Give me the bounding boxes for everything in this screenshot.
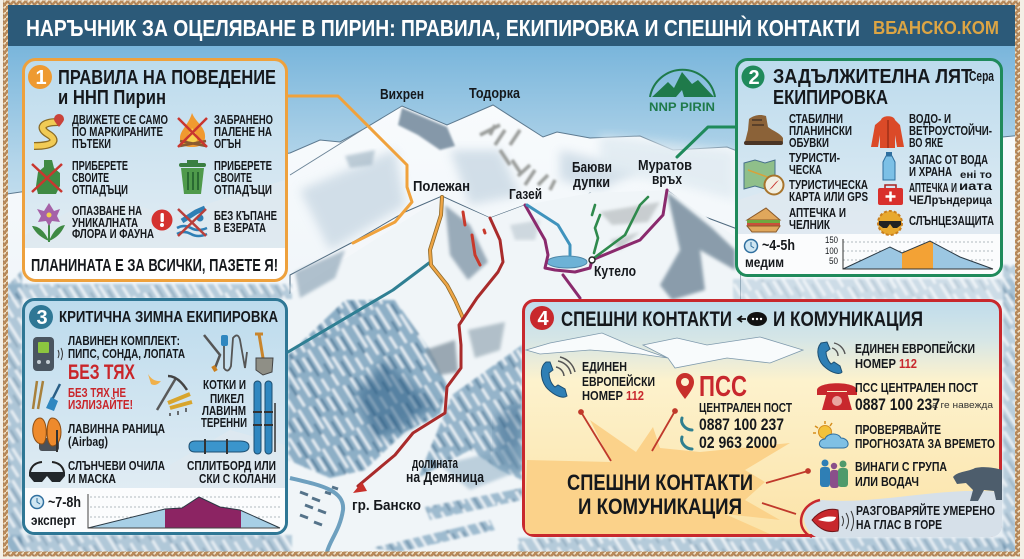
lake [547, 256, 587, 268]
PSS contact right [855, 381, 993, 414]
forecast text [855, 422, 995, 451]
rule text: no fire: ПАЛЕНЕ НА [214, 125, 272, 139]
icon: mouth [812, 509, 854, 532]
slogan: ПЛАНИНАТА Е ЗА ВСИЧКИ, ПАЗЕТЕ Я! [31, 255, 278, 275]
icon: warning [152, 210, 172, 230]
gear text: jacket: ВЕТРОУСТОЙЧИ- [909, 123, 992, 138]
rule text: no swimming: В ЕЗЕРАТА [214, 221, 266, 235]
group text: ВИНАГИ С ГРУПА [855, 460, 947, 474]
crampons and axe text: ТЕРЕННИ [201, 416, 247, 430]
rule text: waste right: ОТПАДЪЦИ [214, 183, 272, 197]
rule text: flora: ФЛОРА И ФАУНА [72, 227, 154, 241]
gear text: jacket: ВОДО- И [909, 112, 951, 126]
peak labels: Тодорка [469, 85, 521, 102]
title: НАРЪЧНИК ЗА ОЦЕЛЯВАНЕ В ПИРИН: ПРАВИЛА, ЕКИПИРОВКА И СПЕШНЍ КОНТАКТИ [26, 14, 860, 41]
rule text: marked trails: ПО МАРКИРАНИТЕ [72, 125, 163, 139]
panel 1: rules [24, 60, 286, 280]
routes [288, 96, 735, 486]
icon: no swimming [177, 208, 207, 236]
badge 2 [742, 66, 764, 88]
icon: airbag pack [33, 418, 61, 452]
panel 2: summer gear: 2 [748, 67, 760, 89]
icon: water bottle [883, 152, 895, 180]
icon: bear [953, 467, 1002, 501]
chart strip [738, 234, 1000, 274]
peak labels: Газей [509, 186, 542, 203]
warning text [68, 361, 135, 412]
orange trail from Polezhan [430, 197, 463, 318]
heading: КРИТИЧНА ЗИМНА ЕКИПИРОВКА [59, 309, 278, 326]
gear text: map: ТУРИСТИЧЕСКА [789, 178, 868, 192]
peak labels [352, 85, 692, 514]
rule text: no swimming: БЕЗ КЪПАНЕ [214, 209, 277, 223]
duration and difficulty: ~4-5h [762, 237, 795, 254]
panel 4: emergency contacts [524, 300, 1002, 537]
sky background [0, 0, 1024, 300]
lower valley forest mass left [288, 300, 447, 478]
heading: ПРАВИЛА НА ПОВЕДЕНИЕ [58, 67, 276, 89]
rule text: no fire [214, 113, 273, 151]
icon: flower [32, 203, 65, 242]
rule text: marked trails [72, 113, 168, 151]
quiet voice text [856, 503, 995, 532]
Bansko town [290, 478, 343, 552]
bottom strip [25, 248, 285, 279]
burst text [567, 470, 753, 519]
airbag text [68, 422, 165, 449]
peak labels: Муратов [638, 157, 692, 174]
splitboard text: СПЛИТБОРД ИЛИ [187, 459, 276, 473]
peak labels: Полежан [413, 178, 470, 195]
peak labels: гр. Банско [352, 497, 421, 514]
gear text: map: ЧЕСКА [789, 163, 822, 177]
gear text: first aid: АПТЕЧКА И [909, 181, 957, 195]
gear text: map: ТУРИСТИ- [789, 151, 840, 165]
icon: map and compass [744, 160, 784, 194]
icon: location pin [676, 373, 694, 399]
rule text: flora: ОПАЗВАНЕ НА [72, 204, 142, 218]
badge 4 [530, 306, 554, 330]
rule text: waste left: ПРИБЕРЕТЕ [72, 159, 128, 173]
EU number left: ЕДИНЕН [582, 360, 627, 374]
rule text: no fire: ОГЪН [214, 137, 241, 151]
rule text: waste right [214, 159, 272, 197]
icon: group [820, 460, 848, 488]
icon: no fire [178, 113, 207, 147]
gear text: first aid: ЧЕЛръндерица [909, 193, 992, 207]
gear text: sandwich [789, 206, 846, 232]
purple route [525, 190, 667, 298]
heading [561, 308, 923, 331]
blue route [527, 205, 570, 255]
PSS contact right: а ге навежда [932, 400, 993, 410]
peak labels: на Демяница [406, 469, 485, 486]
soft slope shadows [300, 150, 640, 250]
clock icon [744, 240, 758, 252]
group text [855, 460, 947, 489]
heading: И КОМУНИКАЦИЯ [773, 308, 923, 331]
gear text: boots: СТАБИЛНИ [789, 112, 843, 126]
warning text: БЕЗ ТЯХ [68, 361, 135, 384]
avalanche kit text: ПИПС, СОНДА, ЛОПАТА [68, 347, 185, 361]
badge 1 [28, 65, 52, 89]
icon: red telephone [817, 383, 857, 410]
rock shadow on Muratov side [660, 192, 735, 300]
rule text: waste right: ПРИБЕРЕТЕ [214, 159, 272, 173]
avalanche kit text: ЛАВИНЕН КОМПЛЕКТ: [68, 334, 180, 348]
icon: boot [744, 115, 783, 145]
group text: ИЛИ ВОДАЧ [855, 475, 919, 489]
crampons and axe text [201, 378, 247, 430]
crampons and axe text: ЛАВИНМ [202, 404, 246, 418]
icon: sun with glasses [878, 211, 902, 235]
peak labels: връх [652, 171, 683, 188]
peak labels: долината [412, 455, 458, 472]
icon: weather [813, 421, 848, 448]
icon: probe and shovel [33, 381, 60, 411]
green leader line to panel 2 [677, 127, 735, 157]
rule text: waste left: СВОИТЕ [72, 171, 109, 185]
NNP Pirin logo [649, 70, 715, 114]
PSS contact: ЦЕНТРАЛЕН ПОСТ [699, 401, 792, 415]
rule text: waste left [72, 159, 128, 197]
heading: ЗАДЪЛЖИТЕЛНА ЛЯТ [773, 66, 972, 88]
gear text: jacket: ВО ЯКЕ [909, 136, 943, 150]
mini mountains [526, 333, 803, 368]
quiet voice text: НА ГЛАС В ГОРЕ [856, 518, 942, 532]
green routes [592, 197, 648, 258]
gear text: boots: ОБУВКИ [789, 136, 829, 150]
panel 1: rules: и ННП Пирин [58, 87, 166, 109]
quiet voice text: РАЗГОВАРЯЙТЕ УМЕРЕНО [856, 503, 995, 518]
icon: sandwich [747, 208, 780, 232]
rule text: no swimming [214, 209, 277, 235]
site name: ВБАНСКО.КОМ [873, 18, 999, 38]
rule text: no fire: ЗАБРАНЕНО [214, 113, 273, 127]
EU number right [855, 341, 975, 371]
icon: jacket [871, 116, 904, 148]
Kutelo marker [589, 257, 595, 263]
gear text: jacket [909, 112, 992, 150]
NNP Pirin logo: NNP PIRIN [649, 100, 715, 114]
front slope body [280, 190, 740, 559]
clock icon [30, 496, 44, 508]
icon: ice axe and crampons [157, 376, 192, 416]
icon: avalanche beacon [33, 337, 62, 371]
crampons and axe text: КОТКИ И [203, 378, 246, 392]
peak labels: Кутело [594, 263, 636, 280]
panel 1: rules: 1 [36, 67, 47, 89]
sunglasses text: СЛЪНЧЕВИ ОЧИЛА [68, 459, 165, 473]
icon: phone left [541, 357, 575, 397]
duration and difficulty [31, 494, 81, 528]
forecast text: ПРОВЕРЯВАЙТЕ [855, 422, 941, 437]
icon: crossed plant [32, 160, 62, 194]
orange tick mark [148, 374, 161, 385]
icon: top right gear [204, 334, 273, 375]
icon: trail [34, 114, 64, 146]
gear text: first aid: иата [959, 179, 992, 193]
PSS contact: 0887 100 237 [699, 415, 784, 434]
Vihren ridge line [290, 130, 362, 175]
panel 3: winter gear [24, 300, 286, 534]
warning text: БЕЗ ТЯХ НЕ [68, 385, 126, 400]
panel 2: summer gear: Сера [969, 68, 994, 85]
gear text: sandwich: ЧЕЛНИК [789, 218, 830, 232]
duration and difficulty: эксперт [31, 512, 76, 528]
gear text: first aid [909, 179, 992, 207]
crampons and axe text: ПИКЕЛ [210, 392, 244, 406]
rule text: marked trails: ДВИЖЕТЕ СЕ САМО [72, 113, 168, 127]
gear text: water: И ХРАНА [909, 165, 952, 179]
burst text: СПЕШНИ КОНТАКТИ [567, 470, 753, 495]
gear text: water: ені то [960, 170, 992, 181]
rocks near route [425, 340, 458, 375]
chart strip [25, 488, 285, 532]
icon: sunglasses [29, 462, 65, 482]
duration and difficulty: ~7-8h [48, 494, 81, 511]
icon: chat arrow [738, 312, 767, 326]
gear text: boots: ПЛАНИНСКИ [789, 124, 852, 138]
title bar [8, 5, 1015, 46]
heading: СПЕШНИ КОНТАКТИ [561, 308, 732, 331]
PSS contact right: 0887 100 237 [855, 395, 940, 414]
connector lines [579, 409, 810, 514]
panel 3: winter gear: 3 [36, 307, 48, 329]
airbag text: ЛАВИННА РАНИЦА [68, 422, 165, 436]
peak labels: Баюви [572, 159, 612, 176]
EU number left: ЕВРОПЕЙСКИ [582, 374, 655, 389]
burst text: И КОМУНИКАЦИЯ [578, 494, 742, 519]
badge 3 [29, 305, 53, 329]
icon: first aid kit [878, 185, 903, 205]
gear text: map [789, 151, 868, 204]
splitboard text: СКИ С КОЛАНИ [199, 472, 276, 486]
elevation chart: 100 [825, 246, 838, 256]
peak labels: дупки [573, 174, 610, 191]
gear text: water: ЗАПАС ОТ ВОДА [909, 153, 988, 167]
PSS contact right: ПСС ЦЕНТРАЛЕН ПОСТ [855, 381, 978, 395]
rule text: waste right: СВОИТЕ [214, 171, 252, 185]
orange leader line to panel 1 [288, 96, 412, 243]
PSS contact [699, 371, 792, 452]
left margin slopes [4, 270, 22, 556]
EU number left [582, 360, 655, 403]
peak labels: Вихрен [380, 86, 424, 103]
speech bubble [804, 491, 1002, 537]
lower valley forest mass right [418, 345, 522, 480]
PSS contact: ПСС [699, 371, 747, 403]
PSS contact: 02 963 2000 [699, 433, 777, 452]
warning text: ИЗЛИЗАЙТЕ! [68, 397, 133, 412]
panel 2: summer gear [736, 60, 1002, 276]
elevation chart: 150 [825, 235, 838, 245]
duration and difficulty [745, 237, 795, 270]
sunglasses text: И МАСКА [68, 472, 116, 486]
rule text: waste left: ОТПАДЪЦИ [72, 183, 128, 197]
rock shading on main peaks [398, 108, 455, 150]
foreground streak bands [372, 488, 522, 552]
gear text: sandwich: АПТЕЧКА И [789, 206, 846, 220]
icon: skis and pole [253, 381, 275, 454]
icon: phone right [818, 342, 845, 373]
teal leader line to panel 3 [288, 263, 429, 352]
gear text: water [909, 153, 992, 181]
starburst [525, 420, 790, 534]
rule text: flora [72, 204, 154, 241]
EU number right: НОМЕР 112 [855, 357, 917, 371]
red route to Bansko [358, 218, 503, 486]
splitboard text [187, 459, 276, 486]
forecast text: ПРОГНОЗАТА ЗА ВРЕМЕТО [855, 437, 995, 451]
gear text: boots [789, 112, 852, 150]
elevation chart: 50 [829, 256, 838, 266]
gear text: map: КАРТА ИЛИ GPS [789, 190, 868, 204]
icon: bin [179, 160, 206, 194]
panel 4: emergency contacts: 4 [538, 308, 550, 330]
elevation chart [88, 494, 280, 528]
rule text: flora: УНИКАЛНАТА [72, 216, 138, 230]
front ridge [290, 190, 740, 300]
EU number left: НОМЕР 112 [582, 389, 644, 403]
gear text: sunscreen: СЛЪНЦЕЗАЩИТА [909, 214, 994, 228]
rule text: marked trails: ПЪТЕКИ [72, 137, 111, 151]
airbag text: (Airbag) [68, 435, 108, 449]
EU number right: ЕДИНЕН ЕВРОПЕЙСКИ [855, 341, 975, 356]
icon: splitboard [189, 439, 249, 454]
elevation chart [825, 235, 993, 269]
avalanche kit text [68, 334, 185, 361]
red short ticks [463, 212, 485, 265]
panel 2: summer gear: ЕКИПИРОВКА [773, 87, 888, 109]
sunglasses text [68, 459, 165, 486]
arrow head at Bansko [353, 482, 367, 493]
icon: small phones [682, 418, 692, 449]
duration and difficulty: медим [745, 254, 784, 270]
